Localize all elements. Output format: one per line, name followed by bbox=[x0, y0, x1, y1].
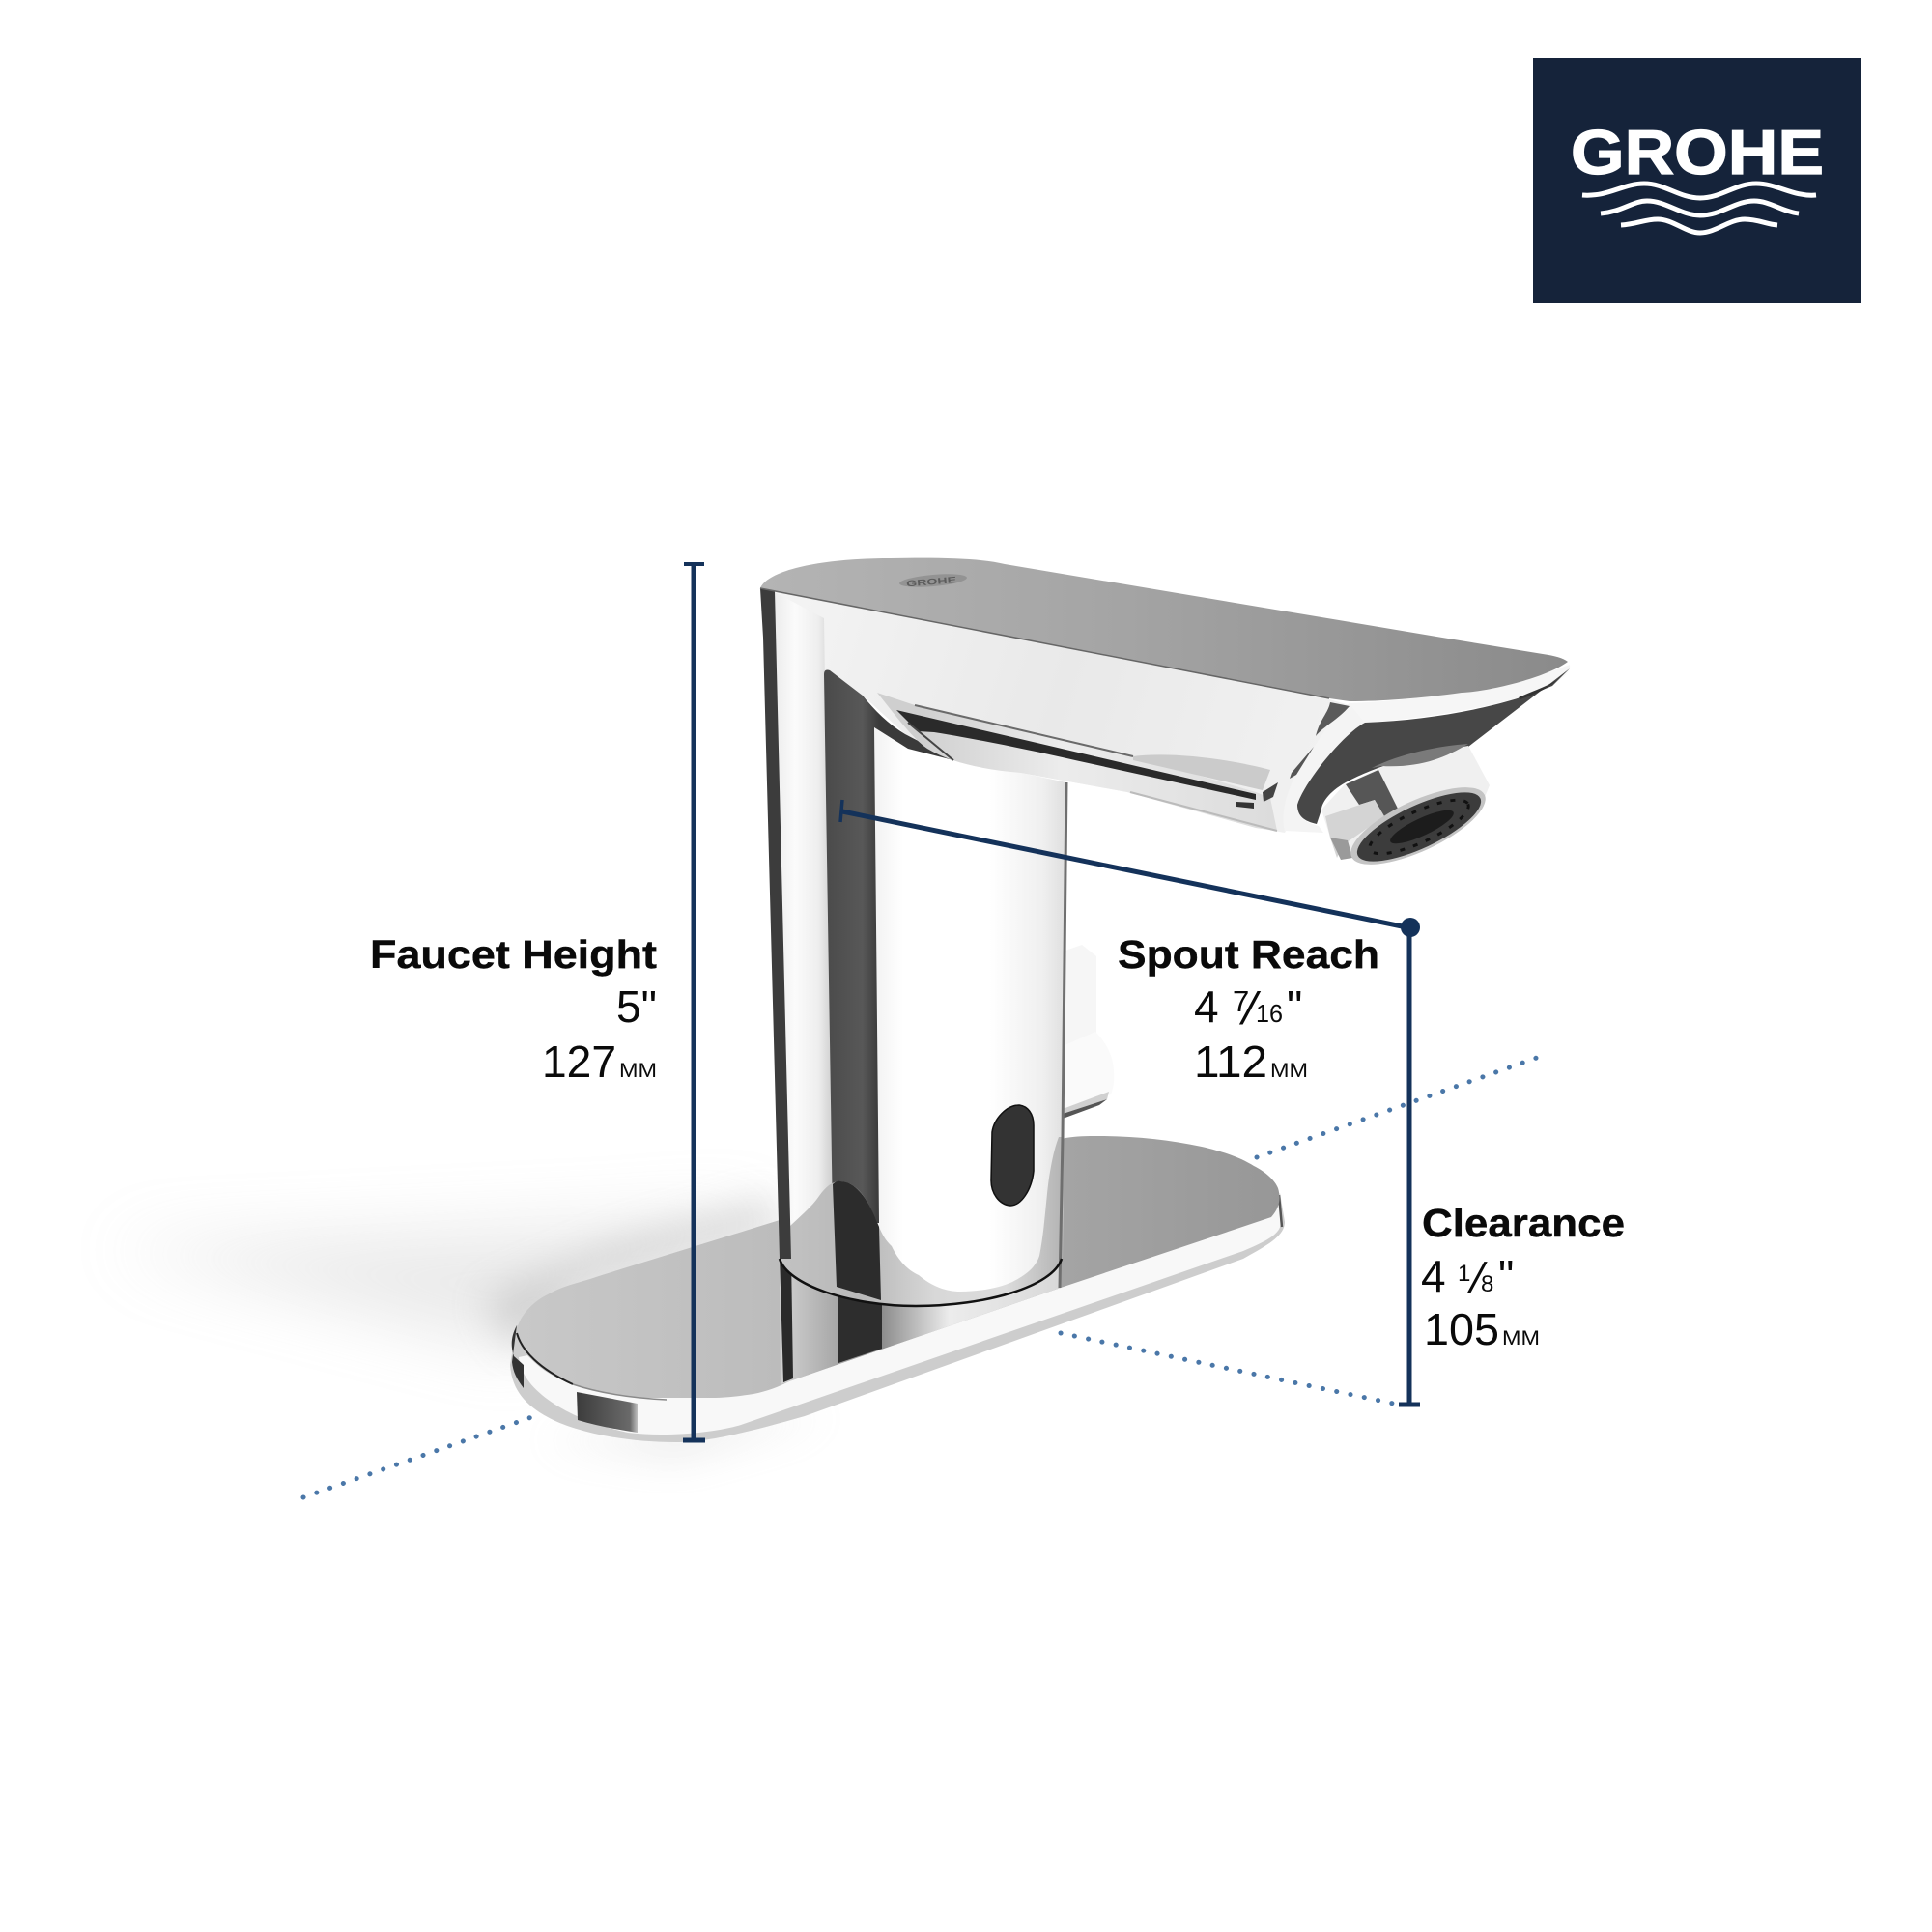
base plate top surface bbox=[517, 1136, 1280, 1398]
column reflection in plate bbox=[780, 1256, 1062, 1384]
valve behind column bbox=[1063, 945, 1114, 1119]
logo: GROHE: GROHE bbox=[1571, 117, 1824, 187]
label: faucet height: Faucet Height bbox=[370, 932, 657, 977]
right edge line bbox=[1060, 782, 1066, 1288]
label: spout reach: 7 bbox=[1233, 984, 1249, 1018]
label: clearance: " bbox=[1498, 1251, 1514, 1301]
logo badge on top plate: GROHE bbox=[906, 575, 956, 588]
spout front face bbox=[760, 588, 1350, 833]
floor shadow bbox=[106, 1198, 831, 1459]
label: clearance: 8 bbox=[1481, 1271, 1493, 1297]
label: spout reach: " bbox=[1287, 981, 1302, 1032]
label: spout reach: Spout Reach bbox=[1118, 932, 1379, 977]
spout front edge bbox=[1283, 702, 1365, 833]
label: clearance bbox=[1421, 1201, 1625, 1354]
label: faucet height bbox=[370, 932, 657, 1087]
label: spout reach: 4 bbox=[1194, 981, 1219, 1032]
foot reflection bbox=[780, 1137, 1063, 1306]
spout right face bbox=[1297, 665, 1570, 824]
dotted clearance lines bbox=[303, 1054, 1548, 1497]
reflected dark band bbox=[833, 1181, 881, 1300]
left dark strip bbox=[760, 588, 791, 1259]
dark band bbox=[824, 670, 953, 1223]
dimension line: clearance bbox=[1399, 927, 1420, 1405]
label: spout reach: 112 bbox=[1194, 1037, 1267, 1087]
column body bbox=[760, 588, 1066, 1306]
base plate rim bbox=[510, 1193, 1285, 1442]
dimension line: spout reach bbox=[840, 800, 1420, 937]
label: clearance: MM bbox=[1502, 1327, 1540, 1350]
label: clearance: 4 bbox=[1421, 1251, 1446, 1301]
stem left bbox=[773, 591, 833, 1259]
foot line bbox=[780, 1259, 1062, 1306]
label: faucet height: 127 bbox=[542, 1037, 616, 1087]
label: faucet height: 5" bbox=[616, 981, 657, 1032]
faucet bbox=[510, 558, 1570, 1442]
label: spout reach: / bbox=[1236, 984, 1264, 1035]
label: spout reach: MM bbox=[1270, 1060, 1308, 1082]
white column bbox=[874, 727, 1066, 1306]
label: clearance: 1 bbox=[1458, 1261, 1470, 1287]
sensor window bbox=[991, 1105, 1034, 1206]
top plate bbox=[760, 558, 1568, 701]
label: faucet height: MM bbox=[619, 1060, 657, 1082]
logo badge on top plate bbox=[899, 572, 967, 589]
label: spout reach bbox=[1118, 932, 1379, 1087]
label: spout reach: 16 bbox=[1256, 999, 1283, 1028]
plate edge line bbox=[517, 1333, 667, 1400]
label: clearance: 105 bbox=[1424, 1304, 1499, 1354]
logo: GROHE bbox=[1533, 58, 1861, 303]
spout underside channel bbox=[877, 693, 1278, 831]
label: clearance: Clearance bbox=[1422, 1201, 1625, 1245]
dimension line: faucet height bbox=[683, 564, 705, 1440]
aerator bbox=[1321, 744, 1495, 880]
label: clearance: / bbox=[1464, 1255, 1490, 1302]
